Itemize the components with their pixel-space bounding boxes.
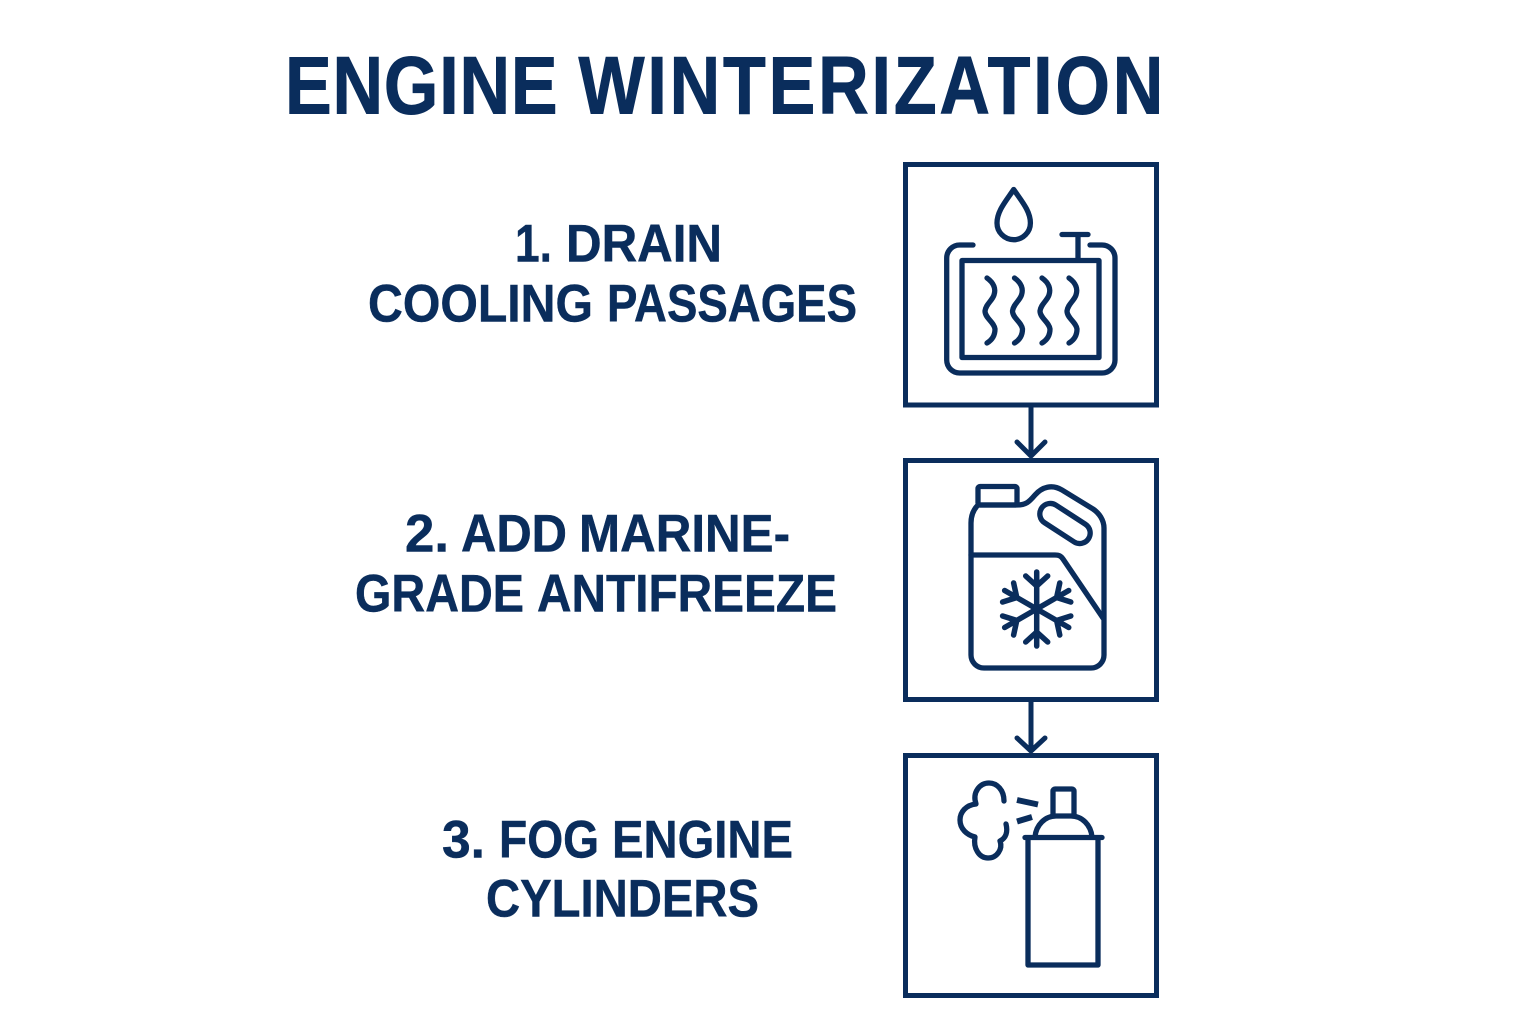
step 1 heading: COOLING xyxy=(368,275,593,334)
step 3 heading: ENGINE xyxy=(612,811,793,870)
step 2 heading: GRADE xyxy=(355,565,524,624)
step 1: drain cooling passages xyxy=(368,164,1156,405)
step 2 panel xyxy=(906,460,1156,700)
icon: antifreeze jug with snowflake xyxy=(971,486,1104,668)
icon: snowflake xyxy=(999,572,1074,646)
arrow: step 1 to step 2 xyxy=(1017,407,1045,456)
icon: radiator with water drop xyxy=(947,190,1115,373)
step 3 heading: 3. xyxy=(442,811,485,870)
title: WINTERIZATION xyxy=(578,40,1163,132)
step 2 heading: 2. xyxy=(405,505,449,564)
step 1 heading xyxy=(368,215,857,334)
step 1 heading: PASSAGES xyxy=(607,275,857,334)
step 1 panel xyxy=(906,164,1156,405)
step 2 heading: ANTIFREEZE xyxy=(537,565,837,624)
step 2: add marine-grade antifreeze xyxy=(355,460,1156,700)
step 3 panel xyxy=(906,756,1156,996)
step 1 heading: 1. xyxy=(515,215,552,274)
step 3 heading: CYLINDERS xyxy=(486,870,759,929)
title: ENGINE xyxy=(285,40,558,132)
icon: fogging spray can xyxy=(960,783,1102,965)
step 2 heading xyxy=(355,505,837,624)
title xyxy=(285,40,1163,132)
step 2 heading: ADD xyxy=(461,505,567,564)
step 1 heading: DRAIN xyxy=(566,215,722,274)
step 3 heading xyxy=(442,811,793,929)
step 3: fog engine cylinders xyxy=(442,756,1156,996)
step 3 heading: FOG xyxy=(499,811,599,870)
step 2 heading: MARINE- xyxy=(579,505,790,564)
arrow: step 2 to step 3 xyxy=(1017,702,1045,751)
